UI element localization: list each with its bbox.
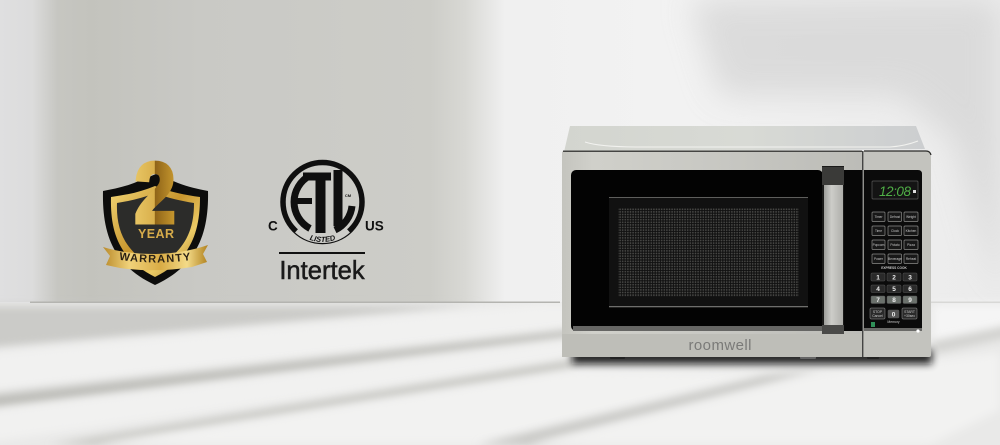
number labels: 7 — [876, 297, 880, 304]
E T L letters — [294, 170, 352, 233]
number labels: 1 — [876, 274, 880, 282]
stop and start labels — [872, 310, 915, 324]
year label: YEAR — [138, 227, 174, 241]
control panel casing — [863, 151, 931, 357]
function labels: Defrost — [890, 215, 900, 219]
function labels — [873, 215, 917, 270]
stop and start labels: Memory — [887, 320, 900, 324]
number labels: 8 — [892, 297, 896, 304]
number labels — [876, 274, 912, 318]
function labels: Time — [875, 229, 882, 233]
logo: ETL listed Intertek — [268, 160, 384, 285]
function labels: Beverage — [888, 257, 902, 261]
microwave shadow — [572, 350, 932, 364]
number labels: 5 — [892, 286, 896, 293]
door frame — [562, 151, 863, 357]
background: wall — [0, 0, 1000, 303]
handle — [822, 166, 844, 334]
stop and start labels: START — [904, 310, 915, 314]
number labels: 9 — [908, 297, 912, 304]
function labels: Potato — [890, 243, 900, 247]
function labels: Timer — [874, 215, 883, 219]
ETL ring — [283, 162, 362, 242]
display — [872, 181, 918, 199]
function labels: Reheat — [906, 257, 916, 261]
microwave — [562, 126, 931, 359]
shield — [103, 174, 208, 285]
feet — [610, 355, 625, 359]
number keys — [870, 273, 917, 319]
stop and start labels: Cancel — [872, 314, 883, 318]
control panel — [864, 170, 922, 333]
function labels: Power — [874, 257, 884, 261]
cm mark: CM — [345, 193, 352, 198]
top casing — [564, 126, 925, 152]
eco mark — [871, 322, 875, 327]
warranty label: WARRANTY — [120, 252, 190, 262]
number labels: 6 — [908, 286, 912, 293]
function labels: Pizza — [907, 243, 915, 247]
us mark: US — [365, 218, 384, 234]
background: floor with light streaks — [0, 302, 1000, 445]
function labels: Clock — [891, 229, 899, 233]
mesh — [618, 208, 799, 297]
stop and start labels: STOP — [873, 310, 883, 314]
stop and start labels: +30sec — [904, 314, 915, 318]
display: 12:08 — [879, 184, 911, 199]
intertek wordmark: Intertek — [279, 257, 365, 285]
number labels: 4 — [876, 286, 880, 293]
function labels: Popcorn — [873, 243, 885, 247]
brand: roomwell — [688, 337, 752, 354]
number labels: 3 — [908, 274, 912, 282]
number labels: 2 — [892, 274, 896, 282]
function labels: Weight — [906, 215, 916, 219]
inner window — [609, 197, 808, 308]
door window — [571, 170, 823, 331]
badge: 2 year warranty — [102, 146, 208, 285]
numeral 2: 2 — [134, 146, 176, 242]
function buttons — [872, 212, 918, 264]
function labels: EXPRESS COOK — [881, 266, 907, 270]
c mark: C — [268, 218, 278, 234]
ribbon — [103, 245, 208, 270]
number labels: 0 — [892, 312, 896, 318]
listed text: LISTED — [310, 235, 335, 242]
function labels: Kitchen — [906, 229, 917, 233]
